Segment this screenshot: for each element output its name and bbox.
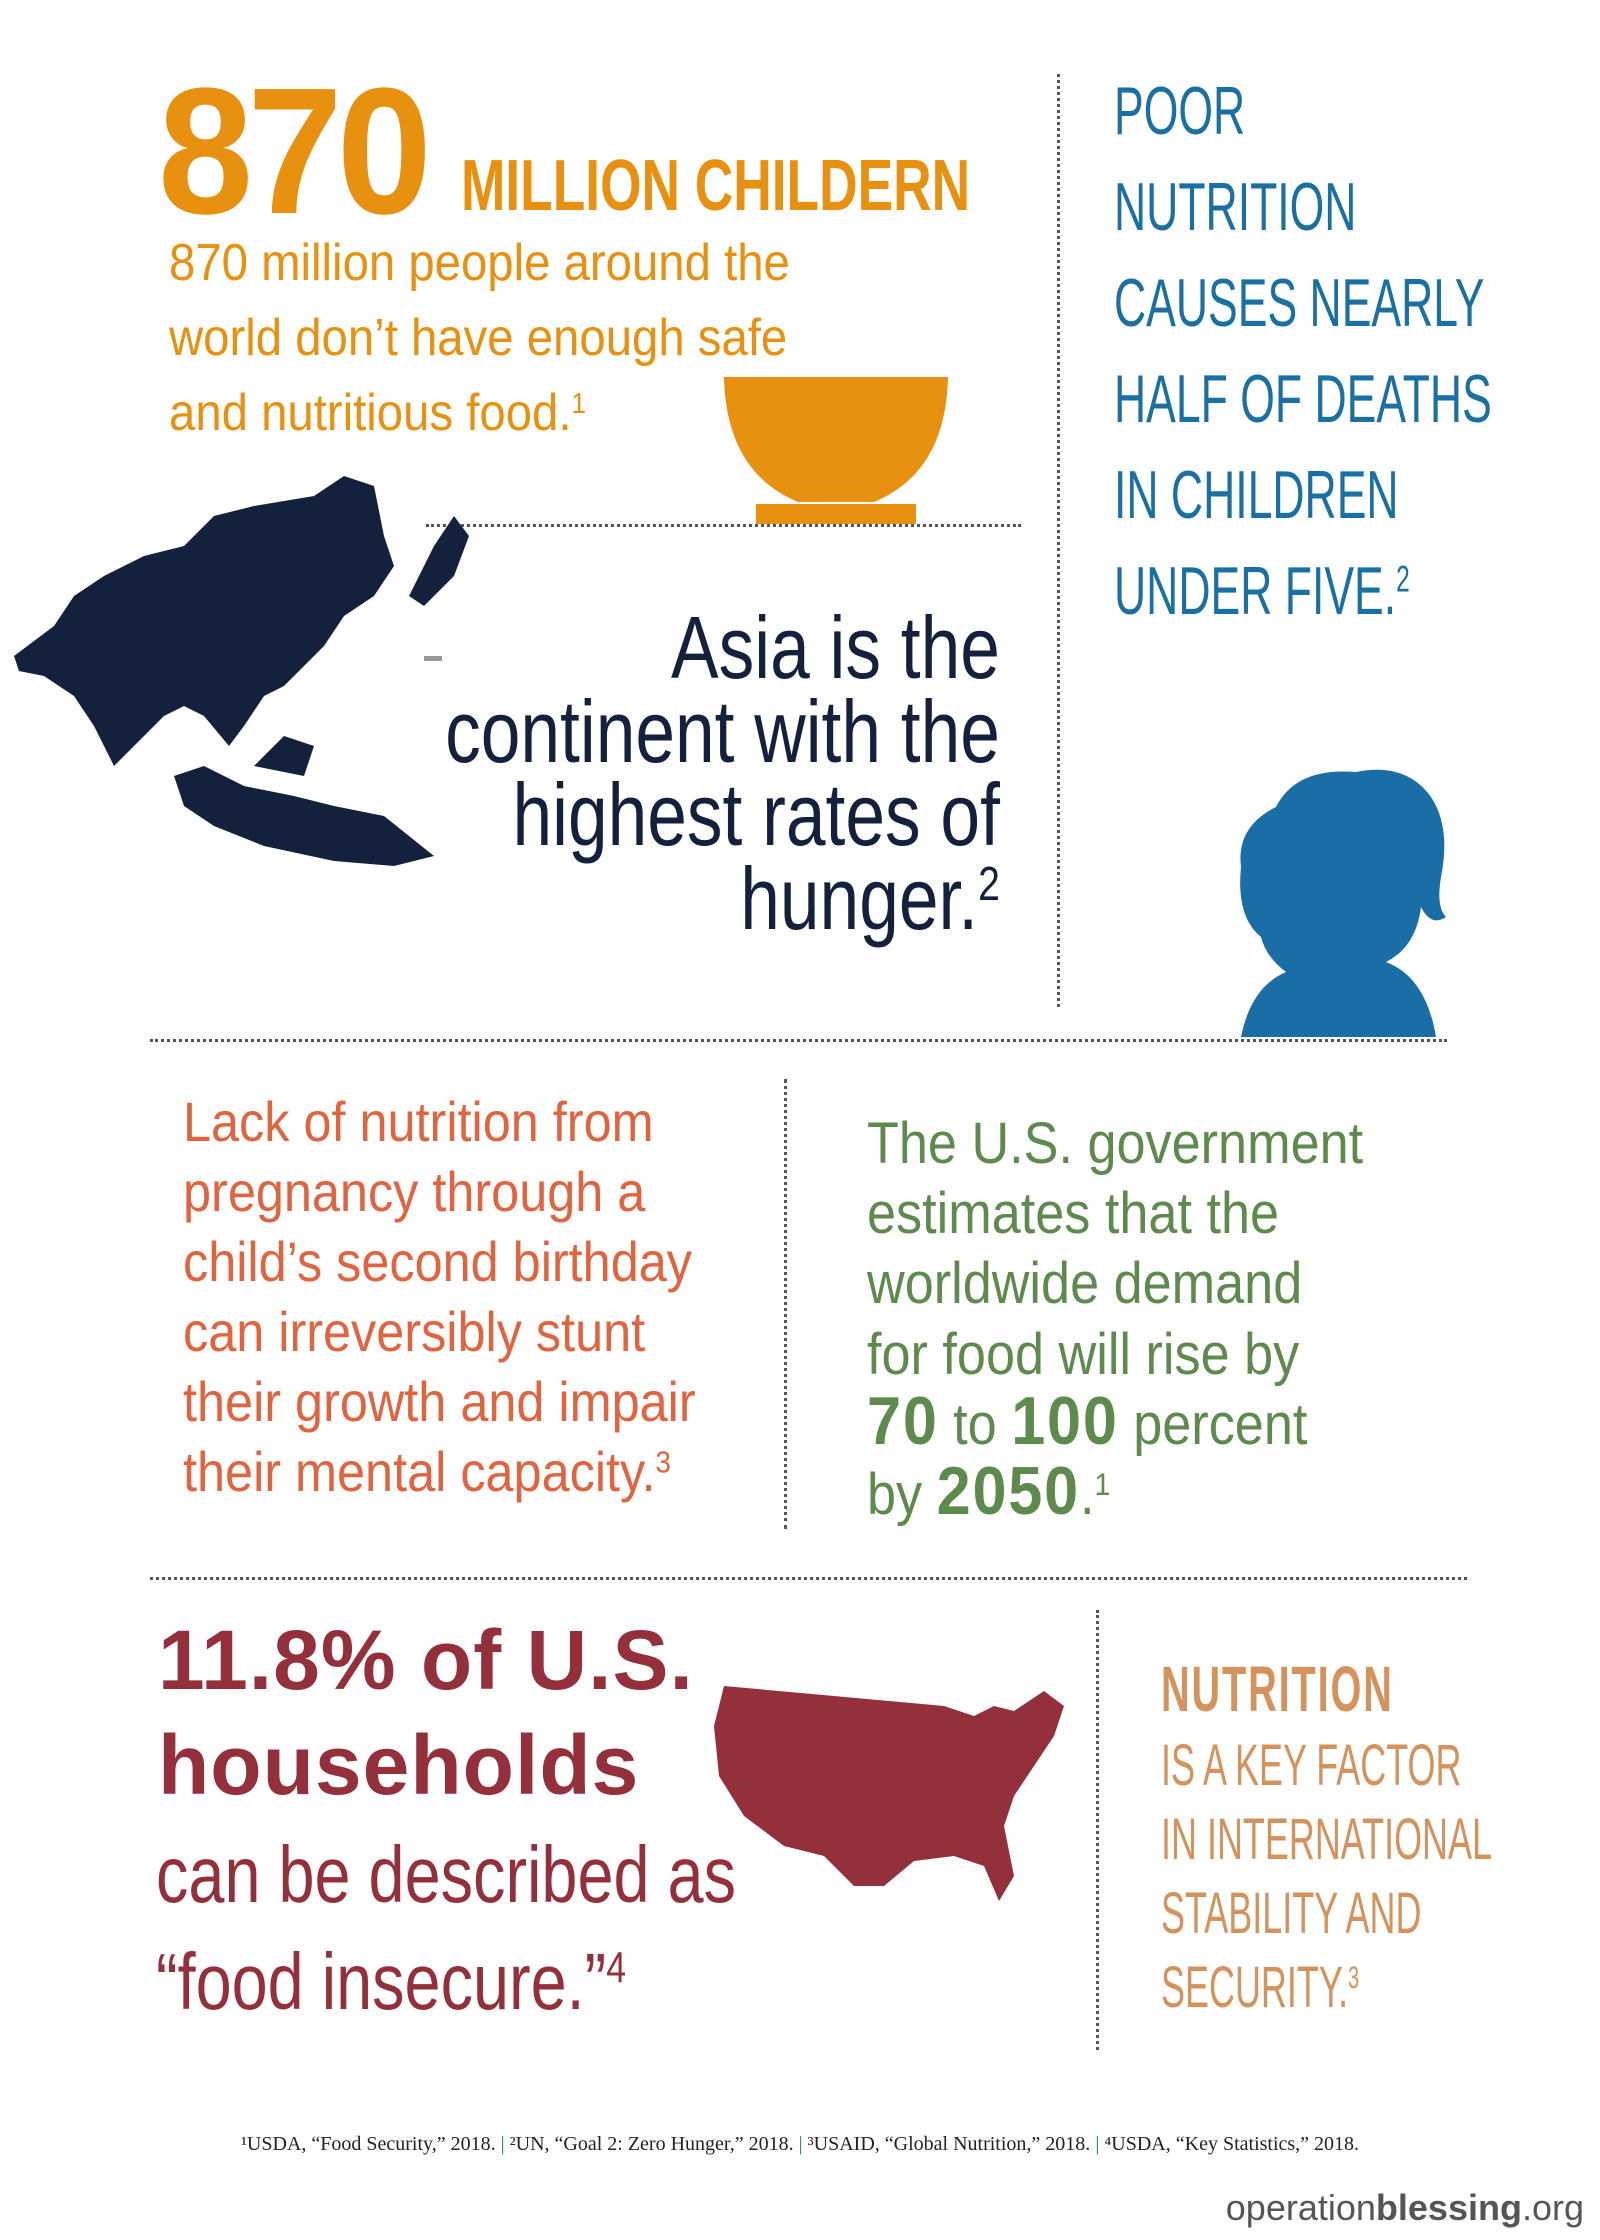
green text block: The U.S. government	[867, 1111, 1363, 1176]
green text block: estimates that the	[867, 1181, 1279, 1246]
map: USA	[714, 1686, 1064, 1901]
orange text block: 870 million people around the	[169, 234, 790, 292]
red text block: can irreversibly stunt	[183, 1300, 645, 1363]
orange text block: world don’t have enough safe	[169, 309, 787, 367]
tan text block: NUTRITION	[1161, 1653, 1394, 1725]
tan text block: IN INTERNATIONAL	[1161, 1807, 1492, 1872]
logo text: operationblessing.org	[1226, 2187, 1584, 2228]
tan text block: SECURITY.3	[1161, 1955, 1359, 2020]
green text block: for food will rise by	[867, 1322, 1299, 1387]
green text block: 70 to 100 percent	[867, 1383, 1307, 1459]
red text block	[183, 1090, 696, 1503]
headline million childern: MILLION CHILDERN	[461, 146, 970, 226]
icon: bowl	[724, 377, 948, 524]
Asia text: highest rates of	[513, 765, 1000, 864]
red text block: Lack of nutrition from	[183, 1090, 654, 1153]
Asia text: hunger.2	[740, 848, 1000, 948]
Asia text	[445, 598, 1000, 948]
red text block: child’s second birthday	[183, 1230, 692, 1293]
Asia text: continent with the	[445, 682, 1000, 780]
map: Asia	[14, 476, 469, 866]
icon: child silhouette	[1240, 770, 1446, 1037]
green text block: by 2050.1	[867, 1453, 1110, 1529]
maroon text: can be described as	[156, 1830, 736, 1919]
blue text block: POOR	[1114, 73, 1245, 149]
red text block: their mental capacity.3	[183, 1440, 671, 1503]
maroon text	[156, 1830, 736, 2026]
maroon stat text: 11.8% of U.S.	[158, 1613, 694, 1707]
footnotes: ¹USDA, “Food Security,” 2018. | ²UN, “Goal 2: Zero Hunger,” 2018. | ³USAID, “Global Nutrition,” 2018. | ⁴USDA, “Key Statistics,” 2018.	[241, 2133, 1359, 2155]
blue text block: UNDER FIVE.2	[1114, 553, 1410, 629]
blue text block: IN CHILDREN	[1114, 457, 1399, 533]
maroon stat text: households	[158, 1718, 639, 1812]
tan text block: STABILITY AND	[1161, 1881, 1421, 1946]
orange text block	[169, 234, 790, 442]
headline 870: 870	[158, 51, 426, 252]
tan text block	[1161, 1653, 1492, 2020]
tan text block: IS A KEY FACTOR	[1161, 1733, 1461, 1798]
orange text block: and nutritious food.1	[169, 384, 586, 442]
blue text block	[1114, 73, 1492, 629]
Asia text: Asia is the	[671, 598, 1000, 697]
maroon text: “food insecure.”4	[156, 1937, 626, 2026]
maroon stat text	[158, 1613, 694, 1812]
blue text block: HALF OF DEATHS	[1114, 361, 1492, 437]
red text block: their growth and impair	[183, 1370, 696, 1433]
blue text block: CAUSES NEARLY	[1114, 265, 1484, 341]
red text block: pregnancy through a	[183, 1160, 645, 1223]
green text block: worldwide demand	[867, 1251, 1302, 1316]
green text block	[866, 1111, 1363, 1529]
blue text block: NUTRITION	[1114, 169, 1356, 245]
